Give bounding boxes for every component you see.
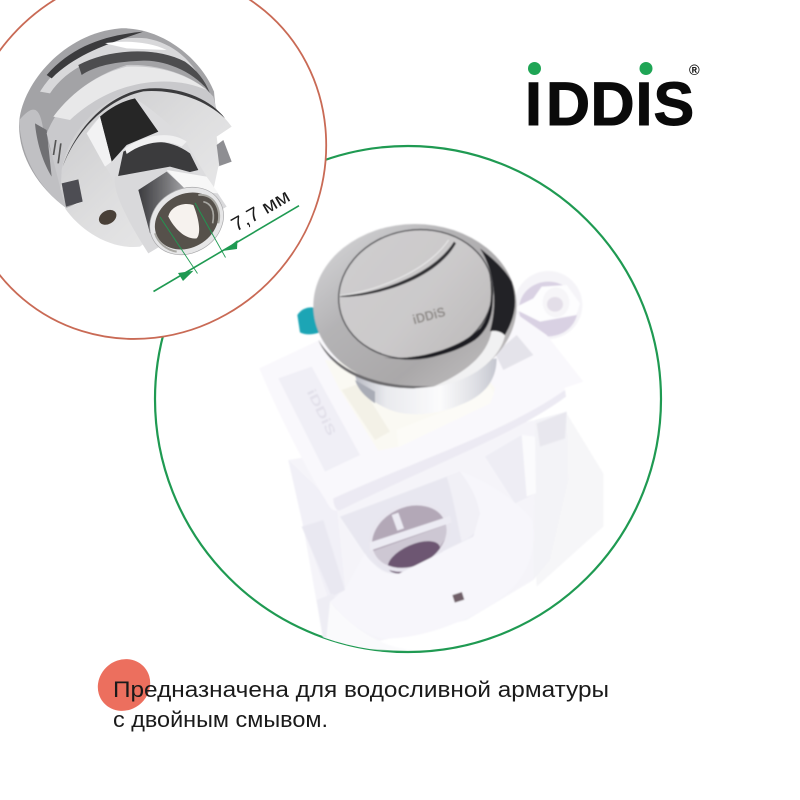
button and float <box>297 218 583 414</box>
legs <box>288 460 345 603</box>
back flange <box>19 28 217 208</box>
photo: chrome button stem <box>19 28 236 268</box>
embossed label text: iDDiS <box>304 387 338 438</box>
sensor square <box>452 592 464 603</box>
accent blob <box>87 648 161 722</box>
panel: detail circle <box>0 0 401 413</box>
screw hole <box>96 207 119 228</box>
button body <box>355 358 497 414</box>
lower disc <box>332 554 442 636</box>
top plate <box>320 344 336 362</box>
float cap <box>514 271 582 339</box>
dimension label: 7,7 мм <box>228 185 294 236</box>
dimension: 7,7 mm <box>154 185 299 292</box>
float ring <box>372 504 445 552</box>
right column <box>533 412 568 580</box>
front disc <box>61 88 232 247</box>
well <box>341 478 473 573</box>
caption text: Предназначена для водосливной арматуры <box>113 677 609 702</box>
logo: IDDIS: IDDIS <box>525 70 694 138</box>
split line <box>340 242 456 297</box>
tube <box>115 167 227 253</box>
white pin <box>168 204 199 239</box>
right backdrop <box>537 418 602 584</box>
plastic body <box>259 337 603 650</box>
teal clip <box>297 307 320 334</box>
plate opening <box>325 360 495 451</box>
body base <box>290 421 534 640</box>
button rim <box>313 224 517 388</box>
drain hole <box>387 540 440 574</box>
embossed label panel <box>278 367 360 472</box>
tube end <box>137 174 236 268</box>
arrow: left <box>178 271 194 281</box>
button brand text: iDDiS <box>411 304 447 327</box>
registered mark: ® <box>689 63 700 79</box>
neck ring <box>117 142 198 183</box>
stem upper <box>87 98 207 233</box>
panel: product photo circle <box>155 146 661 652</box>
right plate corner <box>520 316 548 337</box>
button plate <box>337 228 494 360</box>
well lip over drain <box>357 537 477 593</box>
notch <box>217 140 232 166</box>
logo dots <box>528 62 652 75</box>
caption text <box>113 677 609 732</box>
middle rim <box>47 65 218 200</box>
photo: flush mechanism with button <box>259 218 603 650</box>
arrow: right <box>224 240 238 251</box>
caption text: с двойным смывом. <box>113 707 328 732</box>
left marks <box>53 140 62 163</box>
